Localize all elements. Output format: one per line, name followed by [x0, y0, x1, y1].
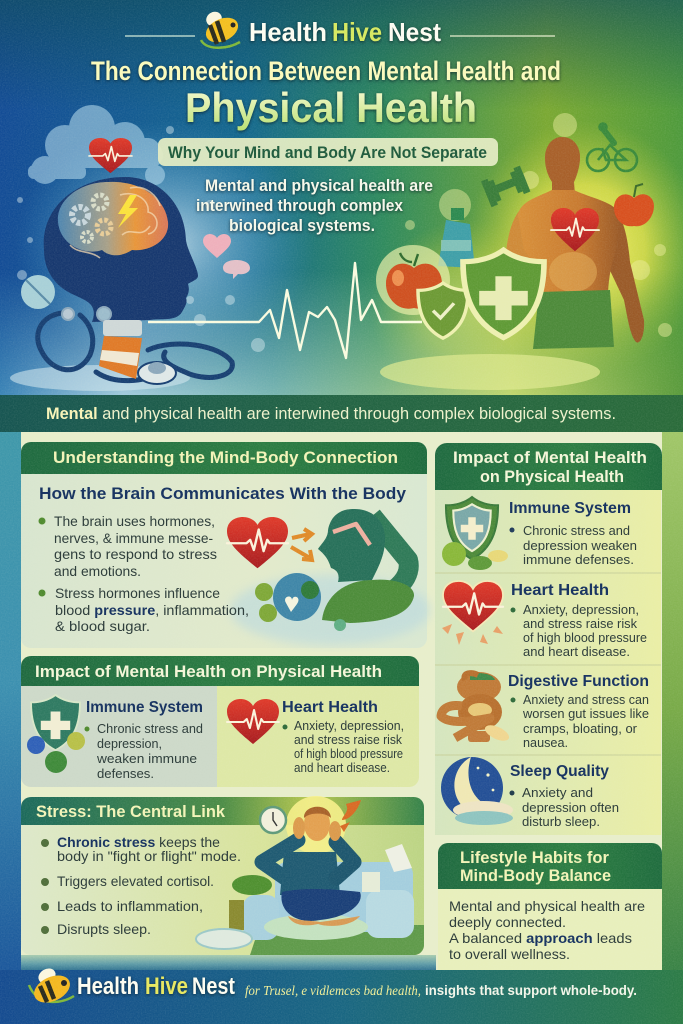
plate [196, 929, 252, 949]
panel: Stress: The Central Link [21, 796, 424, 955]
icon: heart [227, 517, 288, 568]
footer [29, 965, 637, 1008]
stethoscope [38, 307, 232, 381]
bullet list [38, 513, 249, 634]
row: digestive function: nausea. [523, 735, 568, 750]
closing text: Mental and physical health are [449, 898, 645, 914]
illustration: body side [148, 124, 654, 390]
heart health text [282, 699, 404, 775]
bullet list: Triggers elevated cortisol. [57, 873, 214, 889]
row: immune system [442, 497, 637, 570]
torso [518, 190, 620, 292]
row: immune system: immune defenses. [523, 552, 634, 567]
hands [293, 817, 305, 839]
under-panel blend strip [21, 955, 436, 973]
illustration: mind side [10, 105, 250, 391]
closing text [449, 898, 645, 962]
footer wordmark: Hive [145, 973, 188, 1000]
panel heading bar: Lifestyle Habits for [460, 849, 610, 867]
panel heading bar [438, 843, 662, 889]
logo wordmark: Nest [388, 17, 441, 47]
row: heart health: and stress raise risk [523, 616, 637, 631]
heart health text: and stress raise risk [294, 732, 402, 747]
icon: large shield [463, 250, 544, 338]
immune system text: depression, [97, 736, 162, 751]
logo wordmark [249, 17, 441, 47]
sleeves [262, 840, 298, 878]
lightning bolt [118, 195, 138, 228]
row: immune system: Immune System [509, 500, 631, 517]
panel heading bar: Stress: The Central Link [36, 802, 226, 821]
hair [304, 807, 331, 818]
row: digestive function: worsen gut issues like [522, 706, 649, 721]
intro paragraph: Mental and physical health are [205, 176, 433, 195]
pill bottle [99, 320, 142, 379]
sofa [243, 862, 414, 940]
immune system text: defenses. [97, 766, 154, 781]
panel heading bar [21, 442, 427, 474]
footer tagline [245, 982, 637, 999]
head [304, 807, 330, 841]
subtitle pill: Why Your Mind and Body Are Not Separate [168, 143, 487, 162]
right arm [606, 204, 644, 343]
bullet list: & blood sugar. [55, 618, 150, 634]
silhouette with hand on head [318, 509, 414, 623]
panel: Impact of Mental Health right column [435, 443, 662, 835]
row: digestive function: Anxiety and stress can [523, 692, 649, 707]
head and neck [545, 137, 580, 195]
panel mist [230, 575, 430, 645]
icon: pink heart [203, 234, 231, 258]
bullet list: body in "fight or flight" mode. [57, 848, 241, 864]
row: heart health [435, 573, 661, 659]
clouds [28, 105, 165, 185]
speckles [17, 126, 265, 352]
row: digestive function: cramps, bloating, or [523, 721, 638, 736]
icon: bee [201, 9, 242, 48]
stress illustration [196, 796, 424, 955]
panel heading bar [21, 656, 419, 686]
pink hand [333, 524, 370, 545]
body cells [255, 573, 346, 631]
immune system text [84, 699, 203, 781]
immune system text: weaken immune [96, 751, 197, 766]
stress sparks [340, 800, 361, 832]
bullet list: and emotions. [54, 563, 141, 579]
bullet list: blood pressure, inflammation, [55, 602, 249, 618]
bullet list [41, 834, 241, 937]
logo wordmark: Health [249, 17, 327, 47]
subheading: How the Brain Communicates With the Body [39, 484, 407, 503]
head profile [318, 509, 385, 582]
papers [362, 844, 412, 892]
footer tagline: insights that support whole-body. [425, 982, 637, 998]
icon: apple right [614, 184, 654, 226]
legs [281, 889, 361, 921]
footer tagline: for Trusel, e vidlemces bad health, [245, 984, 421, 999]
row: digestive function [435, 665, 661, 750]
heartbeat line [148, 263, 422, 358]
row: sleep quality: depression often [522, 800, 619, 815]
row: sleep quality: disturb sleep. [522, 814, 600, 829]
footer wordmark: Nest [192, 973, 235, 1000]
icon: heart [227, 699, 279, 744]
heart health text: Anxiety, depression, [294, 718, 404, 733]
intro paragraph: biological systems. [229, 216, 375, 235]
immune system text: Chronic stress and [97, 721, 203, 736]
icon: pill [14, 268, 62, 316]
panel heading bar [21, 797, 424, 825]
body [322, 580, 414, 623]
icon: heart above head [89, 138, 132, 173]
row: immune system: Chronic stress and [523, 523, 630, 538]
icon: dumbbell [481, 166, 530, 207]
intro paragraph: interwined through complex [196, 196, 403, 215]
row: immune system: depression weaken [523, 538, 637, 553]
halo [286, 796, 346, 854]
panel: Understanding the Mind-Body Connection [21, 442, 430, 648]
title: The Connection Between Mental Health and [91, 56, 561, 86]
ground mist right [380, 354, 600, 390]
immune system text: Immune System [86, 699, 203, 716]
arrows [291, 529, 312, 560]
left arm [500, 204, 532, 300]
footer wordmark [77, 973, 235, 1000]
brain [58, 182, 168, 258]
row: digestive function: Digestive Function [508, 673, 649, 690]
icon: speech bubble [223, 260, 250, 279]
panel heading bar: Mind-Body Balance [460, 867, 611, 885]
icon: footer bee [29, 965, 74, 1008]
head silhouette [44, 177, 198, 322]
icon: bottle [438, 208, 475, 268]
raised arm and shoulder [372, 516, 409, 600]
summary band [0, 395, 683, 432]
row: heart health: of high blood pressure [523, 630, 647, 645]
footer background [0, 970, 683, 1024]
stethoscope chest piece [138, 362, 176, 384]
man silhouette [500, 137, 644, 349]
panel heading bar: on Physical Health [480, 468, 624, 486]
row: sleep quality [435, 755, 661, 829]
person [262, 807, 361, 926]
icon: small shield [418, 283, 468, 338]
panel heading bar: Understanding the Mind-Body Connection [53, 448, 398, 467]
heart health text: of high blood pressure [294, 746, 403, 761]
row: sleep quality: Anxiety and [522, 785, 593, 800]
logo wordmark: Hive [332, 17, 382, 47]
ground mist left [10, 365, 190, 391]
clock [260, 807, 286, 833]
closing text: deeply connected. [449, 914, 566, 930]
panel: Lifestyle Habits for Mind-Body Balance [438, 843, 662, 970]
icon: bicycle [587, 124, 637, 171]
title [91, 56, 561, 131]
icon: immune shield [27, 695, 85, 773]
panel heading bar: Impact of Mental Health [453, 449, 647, 467]
panel heading bar [435, 443, 662, 490]
gears [72, 195, 111, 242]
subtitle pill [158, 138, 498, 166]
closing text: A balanced approach leads [449, 930, 632, 946]
shorts [533, 290, 614, 349]
icon: apple left [376, 245, 450, 315]
row: heart health: and heart disease. [523, 644, 630, 659]
summary band: Mental and physical health are interwined through complex biological systems. [46, 404, 616, 423]
bullet list: Leads to inflammation, [57, 898, 203, 914]
bullet list: nerves, & immune messe- [54, 530, 213, 546]
bullet list: Disrupts sleep. [57, 921, 151, 937]
heart health text: Heart Health [282, 699, 378, 716]
row: heart health: Anxiety, depression, [523, 602, 639, 617]
bullet list: gens to respond to stress [54, 546, 217, 562]
logo rule left [125, 35, 195, 37]
green floor [250, 925, 424, 955]
icon: heart on chest [551, 208, 599, 251]
bullet list: Chronic stress keeps the [57, 834, 220, 850]
top logo [125, 9, 555, 48]
bullet list: Stress hormones influence [55, 585, 220, 601]
closing text: to overall wellness. [449, 946, 570, 962]
intro paragraph [196, 176, 433, 235]
panel: Impact of Mental Health on Physical Health [21, 656, 419, 787]
title: Physical Health [185, 84, 477, 131]
torso [280, 852, 340, 895]
logo rule right [450, 35, 555, 37]
plant [229, 875, 272, 930]
row: sleep quality: Sleep Quality [510, 763, 609, 780]
feet [288, 916, 360, 926]
footer wordmark: Health [77, 973, 139, 1000]
heart health text: and heart disease. [294, 760, 390, 775]
bullet list: The brain uses hormones, [54, 513, 215, 529]
row: heart health: Heart Health [511, 582, 609, 599]
panel heading bar: Impact of Mental Health on Physical Health [35, 663, 382, 681]
